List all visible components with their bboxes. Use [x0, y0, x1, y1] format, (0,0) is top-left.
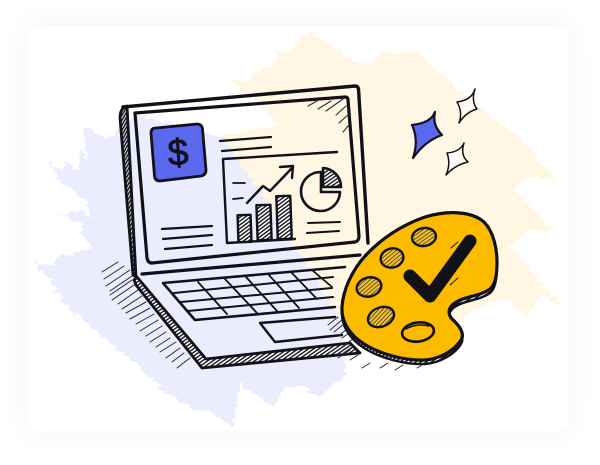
paint well 5: [401, 320, 435, 344]
screen text lines: [162, 137, 271, 249]
laptop: [102, 86, 422, 370]
keyboard: [163, 267, 345, 320]
axis labels: [233, 183, 245, 199]
palette body: [342, 213, 497, 360]
paint well 2: [378, 246, 406, 270]
touchpad: [260, 317, 342, 342]
trend arrow: [247, 166, 293, 203]
laptop base shadow hatching: [102, 262, 190, 368]
touchpad side hatching: [328, 317, 422, 370]
pie main slice: [301, 172, 340, 211]
pie caption lines: [307, 222, 340, 233]
bars: [238, 196, 292, 242]
lid hinge line: [142, 255, 360, 274]
dollar tile icon: [151, 124, 206, 181]
tile: [151, 124, 206, 181]
screen bezel: [135, 97, 359, 263]
palette shadow: [342, 217, 497, 364]
laptop base hatched edges: [134, 277, 360, 368]
cream brush stroke: [222, 30, 563, 340]
check mark: [410, 241, 470, 296]
chart axes: [223, 152, 337, 243]
sparkle: upper outline: [457, 89, 477, 123]
sparkle: blue: [412, 112, 442, 158]
laptop lid outline: [123, 86, 368, 243]
pie chart: [301, 168, 341, 211]
keyboard rows: [174, 277, 333, 311]
paint well 1: [411, 226, 437, 248]
laptop lid edge: [120, 106, 136, 277]
keyboard columns: [198, 270, 332, 314]
screen corner hatching: [308, 99, 349, 132]
check mark accents: [450, 242, 458, 285]
pie hatched slice: [323, 168, 341, 187]
keyboard frame: [163, 267, 345, 320]
sparkle: lower outline: [446, 143, 468, 175]
paint well 4: [365, 303, 397, 331]
paint well 3: [354, 275, 384, 299]
white card panel: [28, 26, 568, 431]
palette: [342, 213, 497, 364]
lavender brush stroke: [35, 115, 345, 428]
dollar sign: $: [166, 131, 190, 174]
bar chart with arrow: [223, 152, 337, 243]
